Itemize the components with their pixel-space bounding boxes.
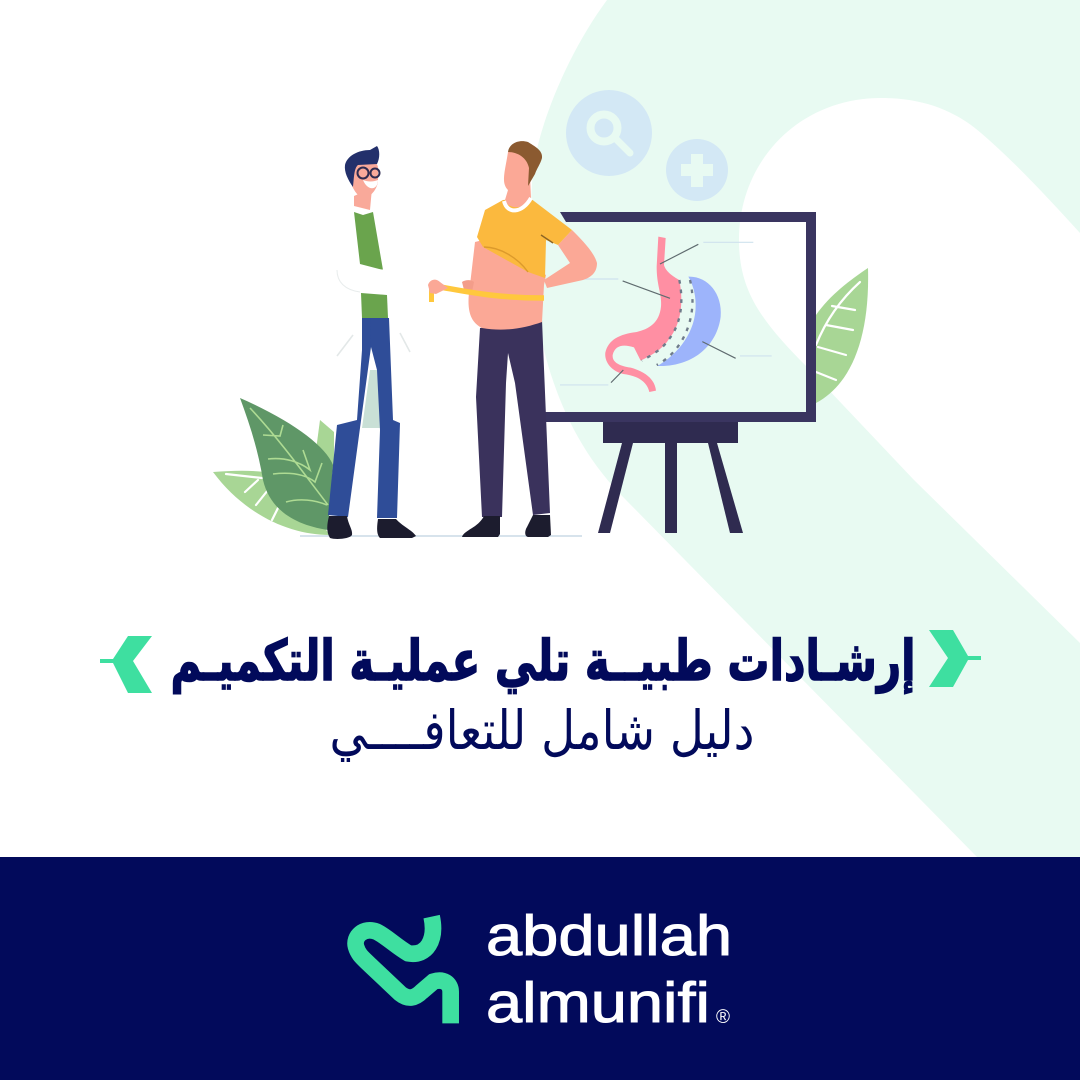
arm on hip — [544, 230, 597, 288]
sweater — [354, 212, 383, 270]
measuring tape — [434, 286, 544, 298]
logo mark — [356, 917, 451, 1023]
chevron right — [929, 630, 981, 687]
chevron left — [100, 636, 152, 693]
glasses — [358, 168, 380, 178]
icon: medical plus — [666, 139, 728, 201]
neck and head — [505, 176, 531, 207]
hair — [345, 146, 379, 187]
neck — [354, 188, 372, 210]
pink stomach sleeve — [605, 237, 681, 392]
belly fingers — [462, 280, 474, 292]
patient trousers — [476, 320, 550, 517]
doctor figure — [300, 146, 582, 539]
title with chevrons — [100, 629, 981, 762]
stomach diagram — [560, 237, 772, 392]
brand name: abdullah — [486, 904, 732, 968]
belly — [468, 240, 546, 330]
patient figure — [428, 141, 597, 537]
ground line — [300, 535, 582, 537]
label lines — [611, 244, 736, 383]
presentation board — [540, 212, 816, 533]
shirt — [477, 198, 572, 278]
registered mark: ® — [716, 1007, 730, 1028]
head — [348, 160, 378, 198]
hair — [508, 141, 542, 186]
gap between legs — [362, 370, 380, 428]
collar — [504, 198, 531, 210]
subtitle: دليل شامل للتعافــــي — [330, 699, 754, 762]
shoes — [327, 516, 352, 539]
staple lines — [642, 280, 692, 365]
footer band — [0, 857, 1080, 1080]
patient shoes — [462, 516, 500, 537]
leaf right — [816, 268, 868, 403]
coat folds — [337, 333, 410, 356]
icon: magnifying glass — [566, 90, 652, 176]
mint background shape — [530, 0, 1080, 857]
coat sleeve — [338, 268, 428, 295]
doctor hand — [428, 280, 448, 294]
brand surname: almunifi — [486, 971, 710, 1035]
leaves left — [213, 398, 334, 535]
smile — [363, 180, 378, 188]
trousers — [328, 318, 372, 517]
blue removed stomach section — [657, 277, 721, 366]
